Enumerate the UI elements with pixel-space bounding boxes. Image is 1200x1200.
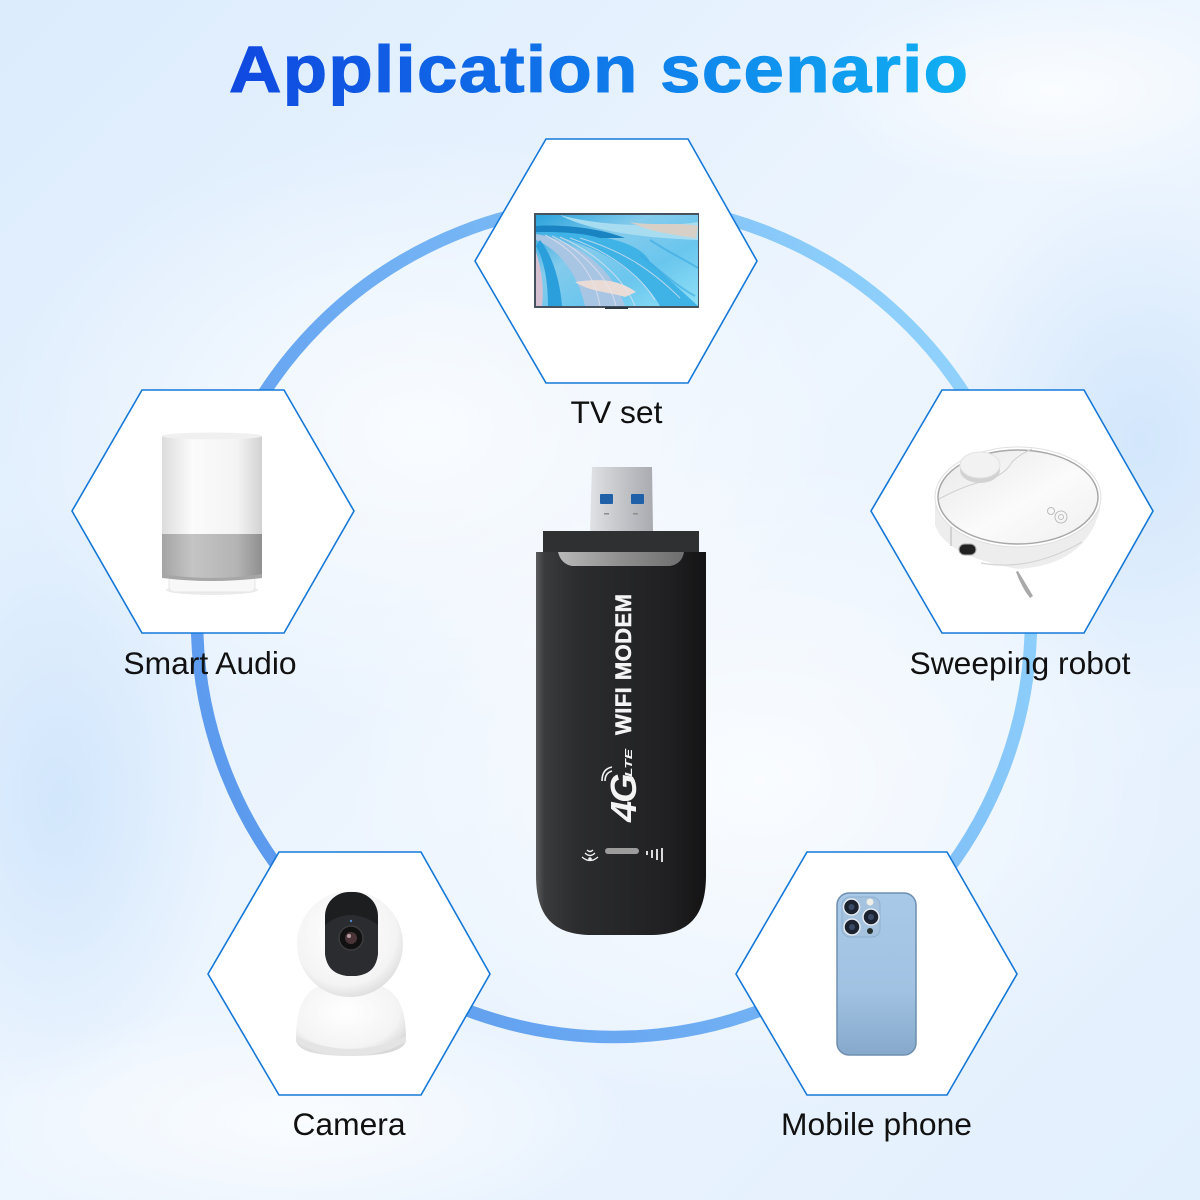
icon: security camera — [296, 891, 406, 1056]
logo: 4G LTE: 4G — [603, 774, 644, 823]
dongle body — [536, 552, 706, 935]
connecting ring — [197, 203, 1031, 1037]
icon: television — [534, 213, 699, 309]
icon: smart speaker — [162, 432, 262, 595]
label: Camera: Camera — [292, 1106, 406, 1142]
icon: robot vacuum — [935, 447, 1101, 598]
icon: smartphone — [837, 893, 916, 1055]
hexagon: Smart Audio — [72, 390, 354, 633]
grey strip — [558, 552, 684, 566]
label: TV set: TV set — [571, 394, 663, 430]
panel: Camera — [208, 852, 490, 1142]
hexagon: TV set — [475, 139, 757, 383]
USB plug — [590, 467, 653, 531]
label: Smart Audio: Smart Audio — [123, 645, 297, 681]
label: Mobile phone: Mobile phone — [781, 1106, 972, 1142]
panel: Sweeping robot — [871, 390, 1153, 681]
panel: Smart Audio — [72, 390, 354, 681]
logo: 4G LTE: LTE — [623, 747, 634, 777]
logo: 4G LTE — [602, 747, 644, 823]
hexagon: Sweeping robot — [871, 390, 1153, 633]
product text: WIFI MODEM: WIFI MODEM — [611, 594, 636, 735]
panel: Mobile phone — [736, 852, 1017, 1142]
panel: TV set — [475, 139, 757, 430]
title: Application scenario — [229, 32, 969, 106]
hexagon: Camera — [208, 852, 490, 1095]
dongle collar — [543, 531, 699, 555]
label: Sweeping robot: Sweeping robot — [910, 645, 1131, 681]
status indicators — [582, 848, 662, 862]
product: 4G LTE USB WiFi modem — [536, 467, 706, 935]
hexagon: Mobile phone — [736, 852, 1017, 1095]
